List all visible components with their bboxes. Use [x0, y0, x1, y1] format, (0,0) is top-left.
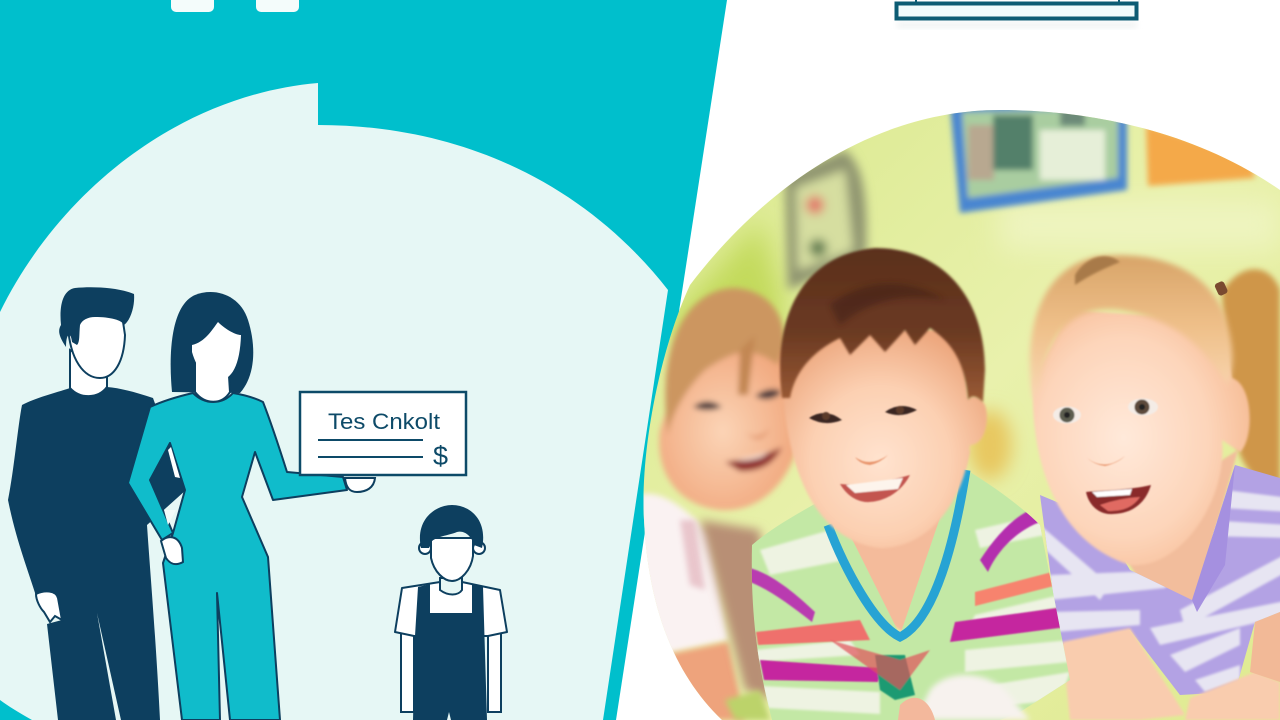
green striped shirt — [745, 460, 1075, 720]
panel: pale circle — [0, 83, 668, 720]
blurred shelf — [785, 150, 866, 290]
arms — [1062, 628, 1185, 720]
check dollar sign: $ — [433, 441, 448, 471]
purple striped shirt — [1040, 465, 1280, 695]
figure: child — [395, 505, 507, 720]
fluffy white toy — [915, 675, 1030, 720]
boy face — [780, 248, 987, 548]
panel: photo of three children — [630, 100, 1280, 720]
figure: woman — [128, 292, 375, 720]
icon: top white tab left — [171, 0, 214, 12]
figure: man — [8, 287, 186, 720]
ponytail — [1222, 269, 1280, 488]
left child — [640, 288, 800, 720]
illustration: family — [8, 287, 507, 720]
blue collar — [828, 470, 966, 637]
girl face — [1030, 255, 1250, 565]
photo background wall — [630, 100, 1280, 720]
girl neck — [1130, 450, 1238, 600]
right child girl — [1030, 255, 1280, 720]
boy neck — [852, 452, 970, 632]
panel: teal background — [0, 0, 727, 720]
check title: Tes Cnkolt — [328, 409, 440, 434]
blurred blue poster — [950, 105, 1127, 213]
check — [300, 392, 466, 475]
blurred orange poster — [1146, 125, 1255, 186]
icon: top right bracket — [896, 0, 1137, 28]
center child boy — [745, 248, 1075, 720]
icon: top white tab right — [256, 0, 299, 12]
